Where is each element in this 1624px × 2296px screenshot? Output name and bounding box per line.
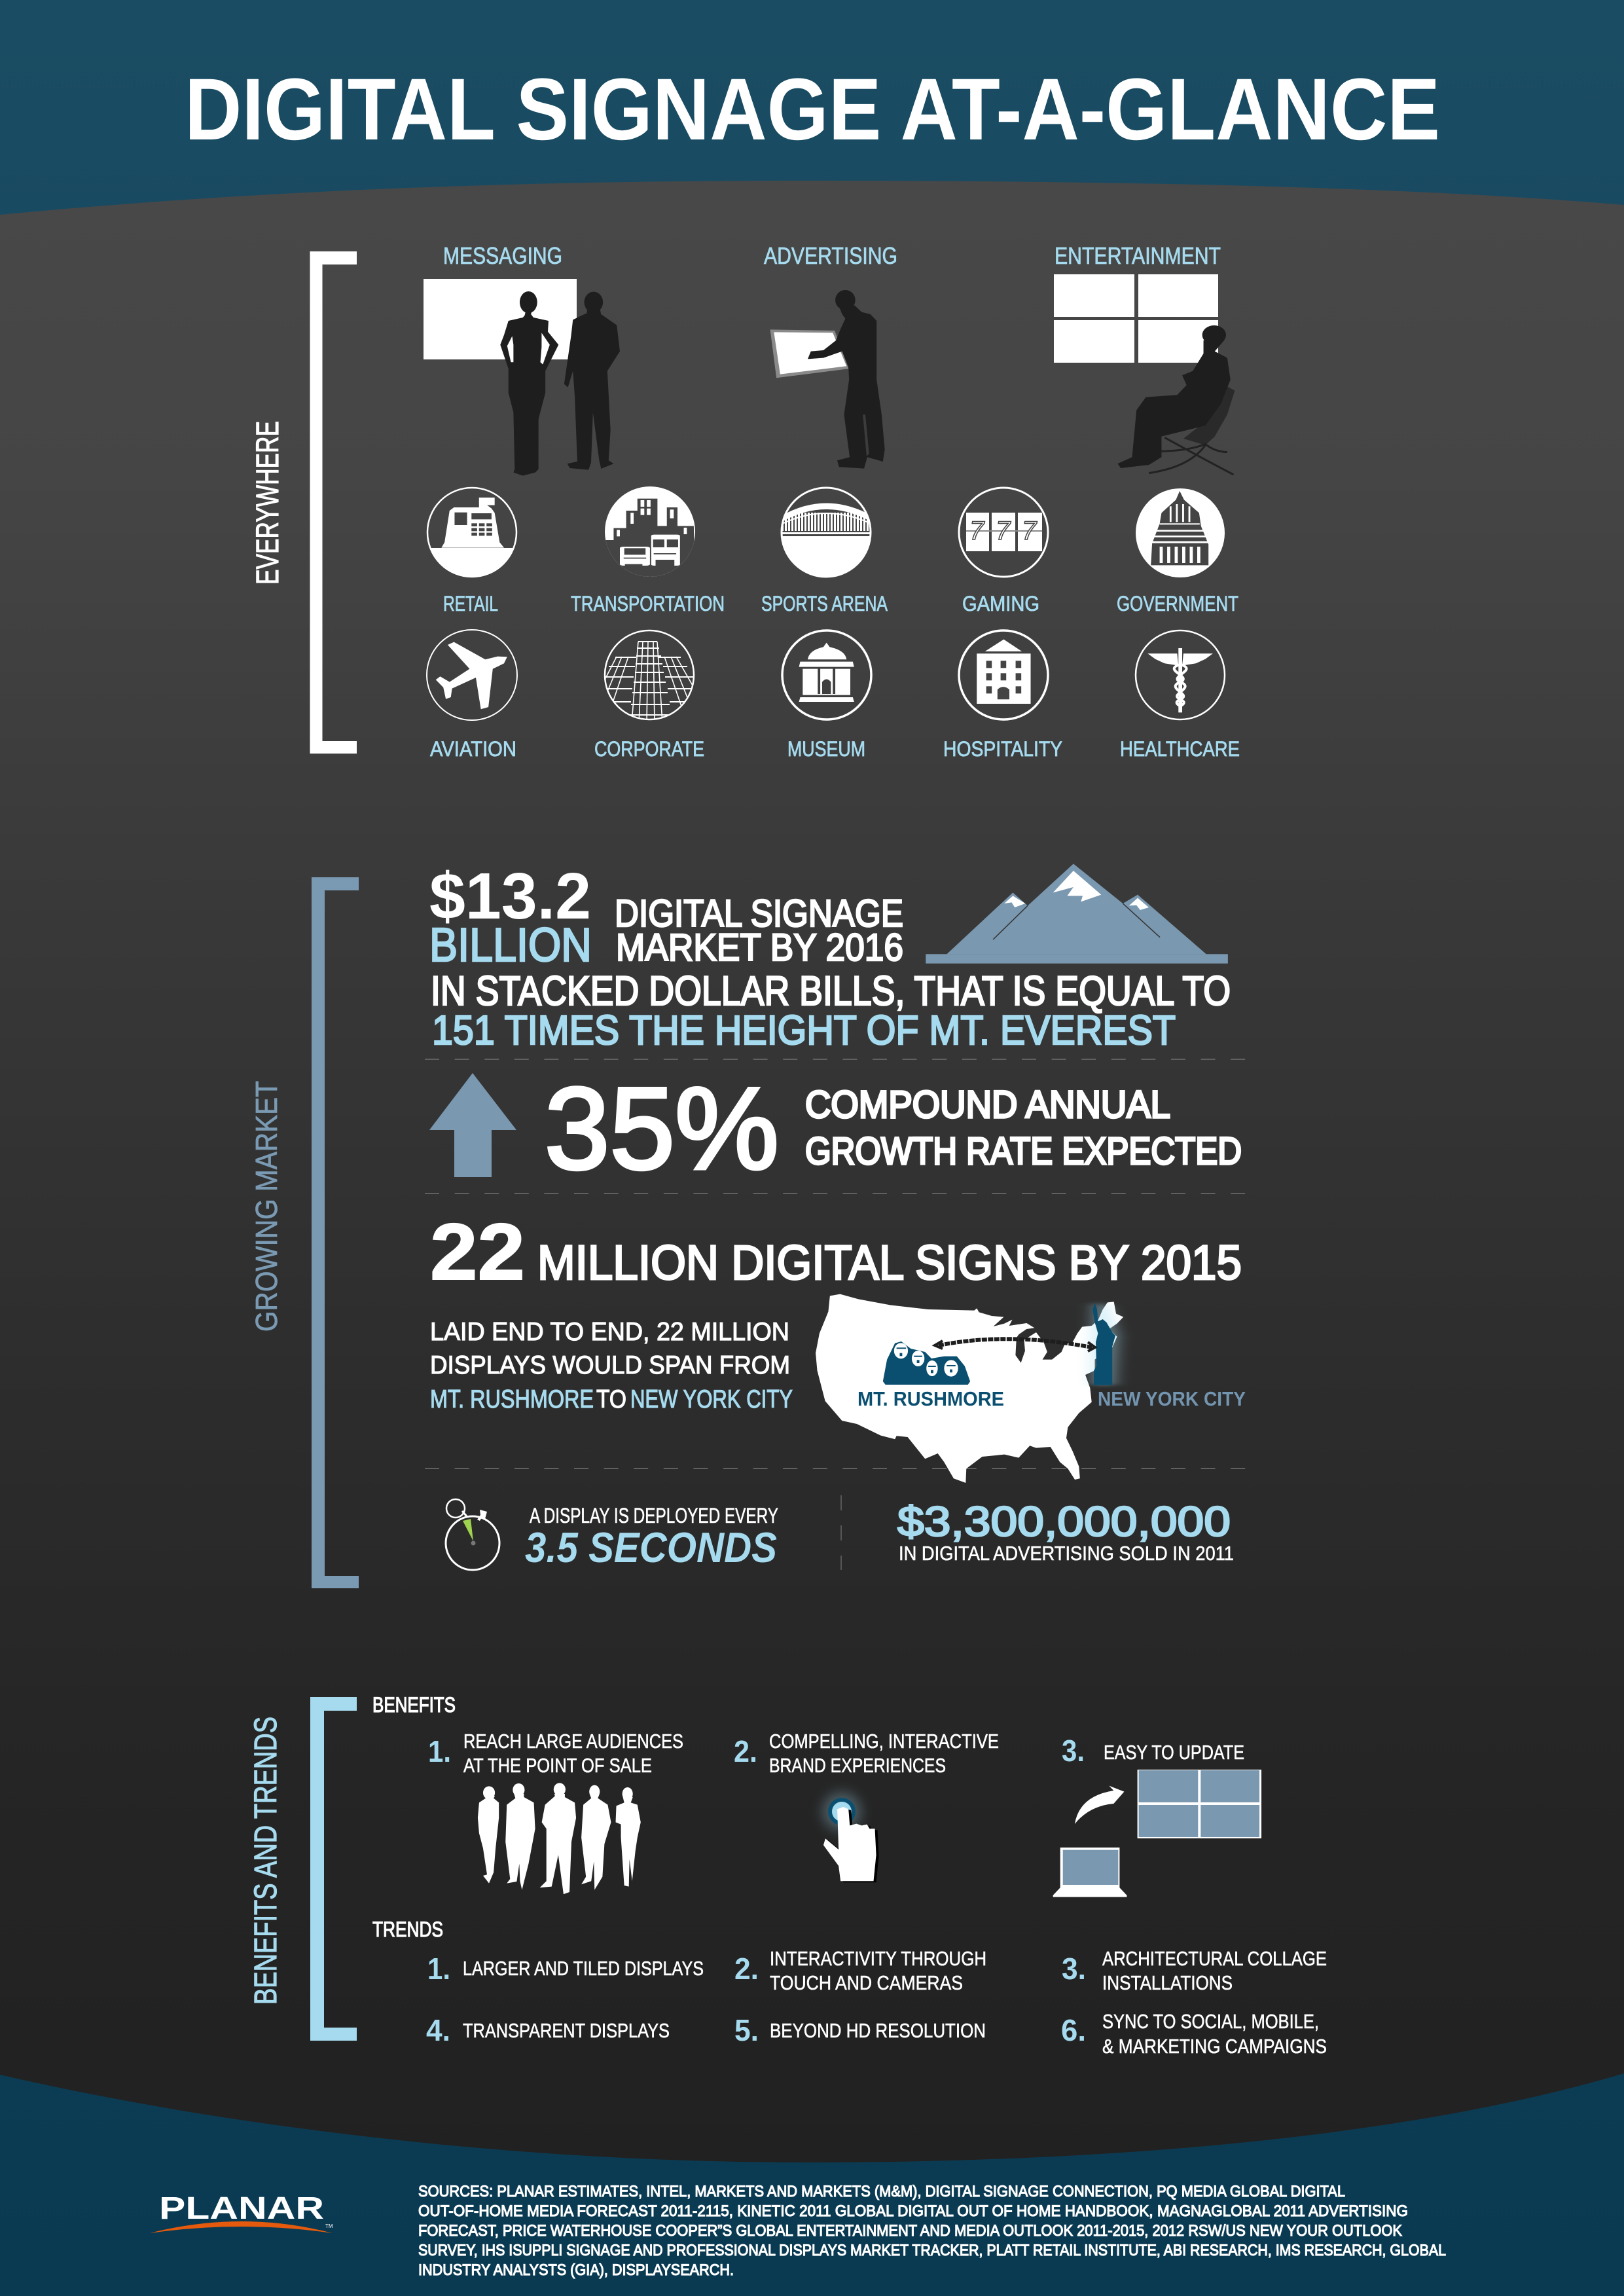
trend 3: INSTALLATIONS: [1102, 1971, 1233, 1994]
text: compound annual growth rate: [805, 1084, 1242, 1173]
side label: growing market: GROWING MARKET: [249, 1081, 283, 1332]
side label: everywhere: EVERYWHERE: [251, 421, 285, 585]
trend 5: BEYOND HD RESOLUTION: [770, 2019, 986, 2042]
stat: 35 percent: 35%: [545, 1063, 779, 1194]
trend 1: LARGER AND TILED DISPLAYS: [463, 1957, 704, 1980]
stat: 3.3 billion advertising: $3,300,000,000: [897, 1498, 1231, 1545]
logo: planar: [150, 2191, 333, 2233]
trend 3: [1062, 1947, 1327, 1994]
benefit 1: AT THE POINT OF SALE: [463, 1754, 652, 1777]
text: laid end to end: MT. RUSHMORE: [430, 1385, 594, 1413]
stat: 22 million digital signs: [430, 1207, 1242, 1296]
icon: gaming: 7: [1022, 517, 1038, 545]
text: sources: FORECAST, PRICE WATERHOUSE COOPER”S GLOBAL ENTERTAINMENT AND MEDIA OUTLOOK 2011-2015, 2012 RSW/US NEW YOUR OUTLOOK: [418, 2222, 1402, 2240]
trend 1: [427, 1952, 704, 1986]
icon: crowd of people: [478, 1783, 641, 1894]
benefit 1: 1.: [428, 1734, 451, 1768]
text: laid end to end: LAID END TO END, 22 MILLION: [430, 1318, 789, 1346]
text: 151 times the height of mt everest: 151 TIMES THE HEIGHT OF MT. EVEREST: [432, 1008, 1176, 1053]
icon: mt rushmore: [883, 1341, 970, 1385]
text: display deployed every 3.5 seconds: A DISPLAY IS DEPLOYED EVERY: [530, 1504, 778, 1527]
text: compound annual growth rate: GROWTH RATE EXPECTED: [805, 1130, 1242, 1173]
trend 5: [734, 2013, 986, 2047]
icon: statue of liberty: [1092, 1303, 1115, 1385]
label: hospitality: HOSPITALITY: [943, 737, 1062, 761]
heading: benefits: BENEFITS: [372, 1693, 456, 1717]
icon: government: [1136, 488, 1225, 577]
stat: 3.3 billion advertising: IN DIGITAL ADVERTISING SOLD IN 2011: [899, 1542, 1234, 1565]
text: laid end to end: TO: [596, 1385, 626, 1413]
trend 6: SYNC TO SOCIAL, MOBILE,: [1102, 2010, 1319, 2033]
icon: gaming: 7: [969, 517, 985, 545]
label: corporate: CORPORATE: [594, 737, 704, 761]
trend 2: [734, 1947, 986, 1994]
icon: mountains: [926, 864, 1228, 964]
title: DIGITAL SIGNAGE AT-A-GLANCE: [185, 61, 1440, 158]
text: display deployed every 3.5 seconds: 3.5 SECONDS: [525, 1523, 777, 1571]
text: digital signage market by 2016: [615, 892, 903, 969]
icon: aviation: [427, 630, 517, 720]
bracket: growing market: [312, 877, 359, 1588]
trend 2: TOUCH AND CAMERAS: [770, 1971, 963, 1994]
icon: museum: [782, 630, 871, 720]
trend 3: ARCHITECTURAL COLLAGE: [1102, 1947, 1327, 1970]
label: museum: MUSEUM: [787, 737, 865, 761]
stat: 22 million digital signs: MILLION DIGITAL SIGNS BY 2015: [537, 1235, 1242, 1290]
stat: 22 million digital signs: 22: [430, 1207, 525, 1296]
trend 2: 2.: [734, 1952, 759, 1986]
icon: gaming: [959, 488, 1048, 577]
text: stacked dollar bills: IN STACKED DOLLAR BILLS, THAT IS EQUAL TO: [431, 968, 1231, 1014]
text: laid end to end: NEW YORK CITY: [630, 1385, 793, 1413]
benefit 2: 2.: [734, 1734, 757, 1768]
benefit 2: BRAND EXPERIENCES: [769, 1754, 946, 1777]
text: display deployed every 3.5 seconds: [525, 1504, 778, 1571]
heading: entertainment: ENTERTAINMENT: [1055, 242, 1221, 269]
stat: 3.3 billion advertising: [897, 1498, 1234, 1565]
trend 4: TRANSPARENT DISPLAYS: [463, 2019, 670, 2042]
label: mt rushmore: MT. RUSHMORE: [857, 1387, 1004, 1410]
trend 4: [426, 2013, 670, 2047]
trend 6: & MARKETING CAMPAIGNS: [1102, 2035, 1327, 2058]
label: healthcare: HEALTHCARE: [1120, 737, 1240, 761]
icon: healthcare: [1136, 630, 1225, 720]
stat: 13.2 billion: BILLION: [429, 919, 592, 972]
panel: benefits and trends: [249, 1693, 1327, 2058]
icon: statue glow: [1092, 1303, 1119, 1385]
panel: growing market: [249, 860, 1246, 1588]
logo: planar: PLANAR: [159, 2191, 324, 2226]
stat: 13.2 billion: $13.2: [429, 860, 591, 933]
heading: advertising: ADVERTISING: [764, 242, 897, 269]
label: sports arena: SPORTS ARENA: [761, 592, 888, 615]
trend 2: INTERACTIVITY THROUGH: [770, 1947, 986, 1970]
benefit 1: [428, 1730, 683, 1777]
icon: laptop updating video wall: [1053, 1770, 1261, 1897]
icon: sports arena: [780, 487, 872, 577]
panel: everywhere: [251, 242, 1240, 761]
logo: planar: TM: [325, 2223, 333, 2229]
heading: messaging: MESSAGING: [443, 242, 562, 269]
icon: corporate: [604, 630, 695, 720]
benefit 3: EASY TO UPDATE: [1104, 1741, 1244, 1764]
trend 1: 1.: [427, 1952, 450, 1986]
benefit 1: REACH LARGE AUDIENCES: [463, 1730, 683, 1753]
heading: trends: TRENDS: [372, 1918, 443, 1941]
text: sources: [418, 2183, 1446, 2279]
label: transportation: TRANSPORTATION: [571, 592, 725, 615]
text: sources: SOURCES: PLANAR ESTIMATES, INTEL, MARKETS AND MARKETS (M&M), DIGITAL SIGNAGE CONNECTION, PQ MEDIA GLOBAL DIGITAL: [418, 2183, 1345, 2200]
side label: benefits and trends: BENEFITS AND TRENDS: [249, 1717, 283, 2005]
trend 3: 3.: [1062, 1952, 1086, 1986]
icon: transportation: [604, 486, 695, 581]
icon: stopwatch: [446, 1499, 499, 1570]
text: digital signage market by 2016: MARKET BY 2016: [616, 926, 903, 969]
text: digital signage market by 2016: DIGITAL SIGNAGE: [615, 892, 903, 935]
label: new york city: NEW YORK CITY: [1098, 1387, 1246, 1410]
benefit 3: 3.: [1062, 1734, 1085, 1768]
label: government: GOVERNMENT: [1117, 592, 1238, 615]
text: sources: OUT-OF-HOME MEDIA FORECAST 2011-2115, KINETIC 2011 GLOBAL DIGITAL OUT OF HOME HANDBOOK, MAGNAGLOBAL 2011 ADVERTISING: [418, 2202, 1408, 2220]
illustration: advertising person at touch screen: [770, 290, 885, 469]
map: united states: [816, 1294, 1246, 1483]
benefit 2: COMPELLING, INTERACTIVE: [769, 1730, 999, 1753]
trend 5: 5.: [734, 2013, 759, 2047]
bracket: everywhere: [310, 251, 357, 754]
benefit 3: [1062, 1734, 1244, 1768]
trend 6: 6.: [1061, 2013, 1086, 2047]
text: laid end to end: DISPLAYS WOULD SPAN FROM: [430, 1351, 790, 1379]
text: compound annual growth rate: COMPOUND ANNUAL: [805, 1084, 1170, 1126]
text: sources: INDUSTRY ANALYSTS (GIA), DISPLAYSEARCH.: [418, 2261, 734, 2279]
icon: gaming: 7: [996, 517, 1011, 545]
label: aviation: AVIATION: [430, 737, 516, 761]
arrow: rushmore to new york: [935, 1339, 1095, 1351]
benefit 2: [734, 1730, 999, 1777]
text: laid end to end: [430, 1318, 793, 1413]
label: gaming: GAMING: [962, 592, 1039, 615]
illustration: entertainment video wall and seated person: [1054, 274, 1235, 475]
stat: 13.2 billion: [429, 860, 592, 972]
bracket: benefits and trends: [310, 1697, 357, 2041]
trend 4: 4.: [426, 2013, 450, 2047]
icon: hospitality: [959, 630, 1048, 720]
illustration: messaging screen and two people: [424, 279, 620, 476]
icon: touch hand: [822, 1792, 879, 1882]
trend 6: [1061, 2010, 1327, 2058]
icon: retail: [427, 488, 516, 577]
text: sources: SURVEY, IHS ISUPPLI SIGNAGE AND PROFESSIONAL DISPLAYS MARKET TRACKER, PLATT RETAIL INSTITUTE, ABI RESEARCH, IMS RESEARCH, GLOBAL: [418, 2242, 1446, 2259]
label: retail: RETAIL: [443, 592, 498, 615]
icon: up arrow: [429, 1073, 516, 1177]
